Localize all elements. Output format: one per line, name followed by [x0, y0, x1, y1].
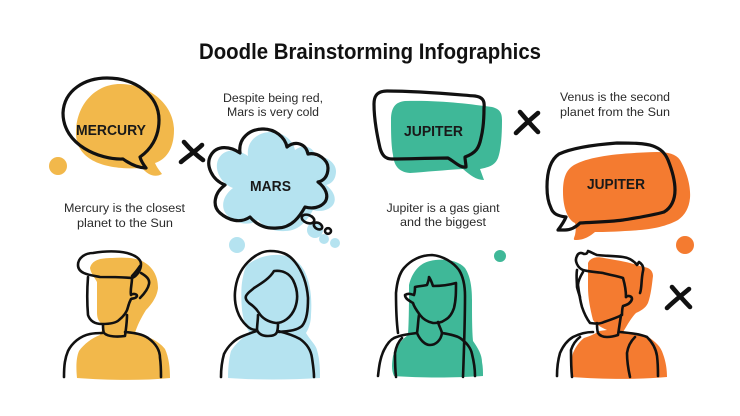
person: mercury [64, 252, 170, 380]
icon: cross mercury [181, 142, 203, 162]
text: mars description: Mars is very cold [227, 105, 319, 119]
person: mars [221, 251, 320, 380]
panel: mars [209, 91, 340, 380]
decorative dot: mars [229, 237, 245, 253]
speech bubble: venus: JUPITER [587, 177, 645, 193]
text: mercury description [64, 201, 186, 230]
thought bubble: mars: MARS [250, 179, 291, 195]
decorative dot: venus [676, 236, 694, 254]
person: jupiter [378, 255, 483, 378]
text: mercury description: planet to the Sun [77, 216, 173, 230]
text: mars description [223, 91, 323, 119]
text: venus description: Venus is the second [560, 90, 670, 104]
title: Doodle Brainstorming Infographics [199, 39, 541, 64]
text: venus description [560, 90, 670, 119]
text: mars description: Despite being red, [223, 91, 323, 105]
decorative dot: jupiter [494, 250, 506, 262]
text: jupiter description: and the biggest [400, 215, 487, 229]
speech bubble: venus [547, 143, 690, 240]
thought bubble: mars [209, 129, 340, 248]
text: mercury description: Mercury is the closest [64, 201, 186, 215]
panel: jupiter [374, 91, 538, 378]
decorative dot: mercury [49, 157, 67, 175]
text: jupiter description: Jupiter is a gas giant [386, 201, 500, 215]
text: jupiter description [386, 201, 500, 229]
icon: cross venus [667, 287, 690, 308]
person: venus [557, 251, 667, 379]
text: venus description: planet from the Sun [560, 105, 670, 119]
speech bubble: mercury: MERCURY [76, 123, 146, 139]
panel: mercury [49, 78, 203, 380]
panel: venus [547, 90, 694, 379]
speech bubble: mercury [63, 78, 174, 176]
speech bubble: jupiter [374, 91, 502, 180]
cloud tail [301, 213, 340, 248]
speech bubble: jupiter: JUPITER [404, 124, 463, 140]
icon: cross jupiter [516, 112, 538, 133]
